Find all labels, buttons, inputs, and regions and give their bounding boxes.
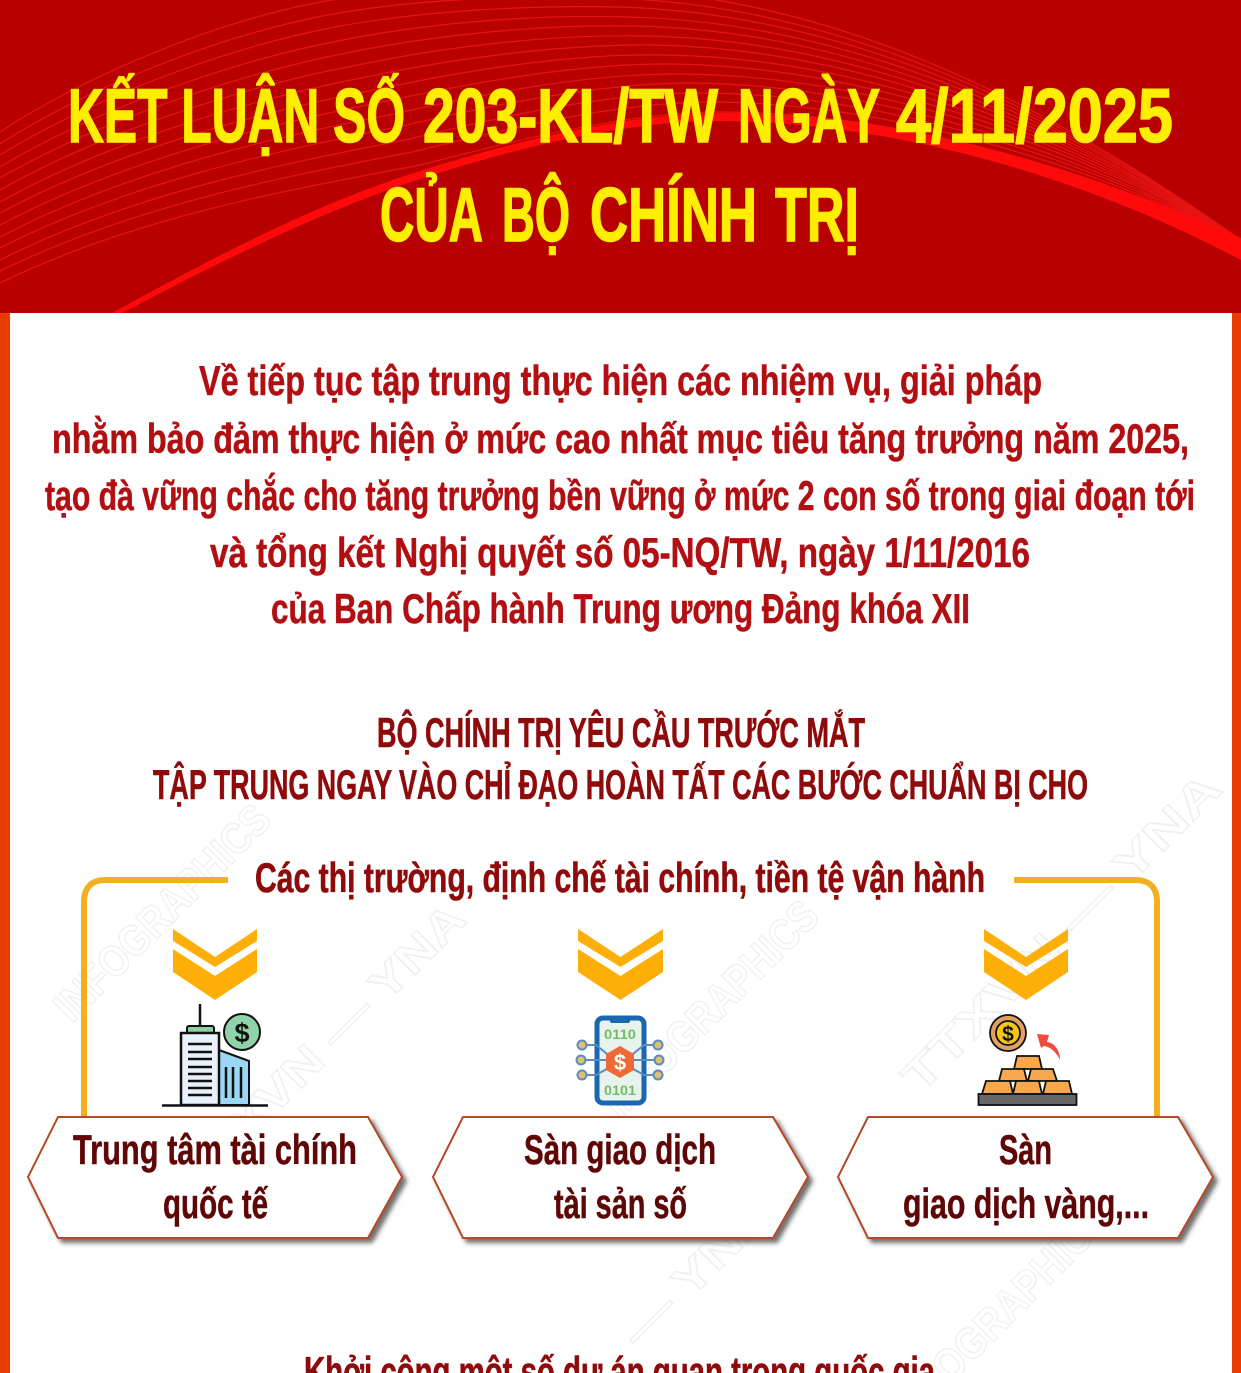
watermarks: TTXVN — YNA — [172, 894, 476, 1197]
intro text block: của Ban Chấp hành Trung ương Đảng khóa XII — [271, 585, 970, 632]
icon: digital asset phone: 0110 — [604, 1026, 636, 1042]
bracket left — [84, 880, 228, 1120]
box: gold exchange: Sàn — [999, 1126, 1052, 1173]
chevron middle — [578, 929, 663, 1000]
box: financial centre: quốc tế — [163, 1180, 268, 1227]
watermarks — [44, 763, 1231, 1373]
icon: digital asset phone — [576, 1018, 664, 1103]
title: KẾT LUẬN SỐ — [68, 73, 405, 159]
box: gold exchange: giao dịch vàng,... — [903, 1180, 1149, 1227]
watermarks: — YNA — [612, 1188, 781, 1357]
icon: gold bars and coin — [978, 1015, 1076, 1105]
section heading — [153, 708, 1088, 808]
header panel — [0, 0, 1241, 313]
intro text block — [45, 357, 1195, 632]
box: gold exchange — [838, 1117, 1213, 1238]
chevron right — [984, 929, 1068, 1000]
title: BỘ — [502, 173, 570, 258]
watermarks: INFOGRAPHICS — [44, 795, 281, 1031]
box: financial centre: Trung tâm tài chính — [73, 1126, 357, 1173]
title: CHÍNH — [590, 173, 757, 258]
icon: gold bars and coin: $ — [1002, 1023, 1014, 1046]
bright red swoosh — [112, 113, 1241, 313]
title — [68, 73, 1173, 258]
watermarks: INFOGRAPHICS — [592, 891, 829, 1127]
box: digital asset exchange: Sàn giao dịch — [524, 1126, 716, 1173]
title: CỦA — [380, 173, 483, 258]
icon: digital asset phone: $ — [614, 1050, 626, 1075]
title: 203-KL/TW — [423, 74, 718, 159]
title: TRỊ — [775, 173, 859, 258]
watermarks: TTXVN — YNA — [892, 763, 1231, 1102]
side border left — [0, 313, 10, 1373]
chevron left — [173, 929, 257, 1000]
side border right — [1232, 313, 1241, 1373]
title: NGÀY — [738, 74, 880, 159]
title: 4/11/2025 — [896, 74, 1173, 159]
box: financial centre — [28, 1117, 402, 1238]
icon: financial centre building — [162, 1004, 268, 1106]
section heading: BỘ CHÍNH TRỊ YÊU CẦU TRƯỚC MẮT — [377, 708, 865, 756]
icon: digital asset phone: 0101 — [604, 1082, 636, 1098]
icon: financial centre building: $ — [234, 1018, 250, 1048]
intro text block: và tổng kết Nghị quyết số 05-NQ/TW, ngày 1/11/2016 — [210, 529, 1030, 576]
bracket right — [1014, 880, 1157, 1120]
box: digital asset exchange — [433, 1117, 808, 1238]
box: digital asset exchange: tài sản số — [554, 1180, 687, 1227]
